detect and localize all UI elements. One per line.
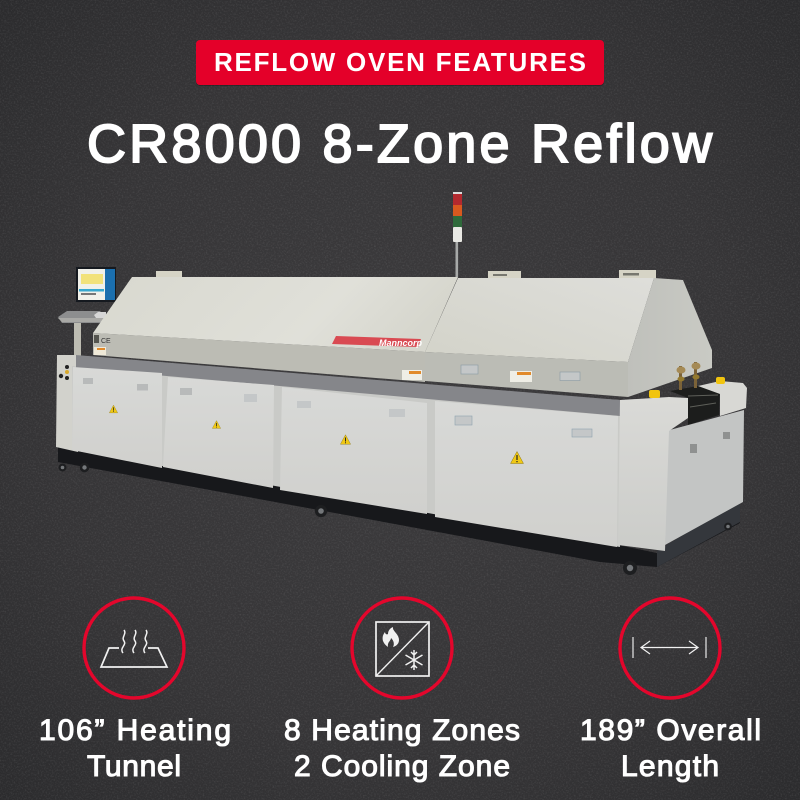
Manncorp logo [332,336,423,348]
banner: reflow oven features [196,40,604,86]
icon: length arrow [620,598,720,698]
label: heating and cooling zones: 8 Heating Zones [284,714,520,747]
CE mark and left label: CE [101,338,111,345]
right hood side [628,278,712,397]
right cabinet front [618,397,688,551]
door 1 [72,367,162,468]
right end upper block [698,381,747,416]
feature: heating and cooling zones [284,598,520,783]
feature: heating tunnel [39,598,231,783]
stack light tower [453,192,462,277]
hood labels [156,270,656,278]
icon: heated tunnel [84,598,184,698]
label: heating and cooling zones: 2 Cooling Zone [294,750,510,783]
door 3 [280,387,427,514]
right hood top [425,278,654,362]
hood handles and warning stickers [402,365,580,382]
icon: flame and snowflake [352,598,452,698]
right cabinet side [665,410,744,545]
left end panel [56,355,78,452]
CE mark and left label [94,335,111,355]
left hood band [93,333,425,382]
reflow oven machine [56,192,747,575]
label: 106 inch heating tunnel: Tunnel [87,750,181,783]
door 4 [435,401,618,547]
brass gauges [676,362,700,390]
grey strip under hood [76,355,620,416]
side latches [690,432,730,453]
conveyor opening [670,382,720,425]
wheels [59,463,732,575]
door 2 [163,377,274,488]
control monitor and shelf [58,267,116,356]
label: 106 inch heating tunnel [39,714,231,783]
base side [657,500,740,567]
feature: overall length [580,598,761,783]
Manncorp logo: Manncorp [379,338,423,348]
label: 189 inch overall length: 189” Overall [580,714,761,747]
label: heating and cooling zones [284,714,520,783]
lower frame behind the doors [72,366,620,547]
yellow buttons [649,377,725,398]
right hood band [425,352,628,397]
label: 189 inch overall length: Length [621,750,719,783]
banner: reflow oven features: REFLOW OVEN FEATURES [214,47,586,77]
left hood top [93,277,458,352]
label: 189 inch overall length [580,714,761,783]
title: CR8000 8-Zone Reflow [87,114,713,174]
label: 106 inch heating tunnel: 106” Heating [39,714,231,747]
black base [58,447,740,567]
